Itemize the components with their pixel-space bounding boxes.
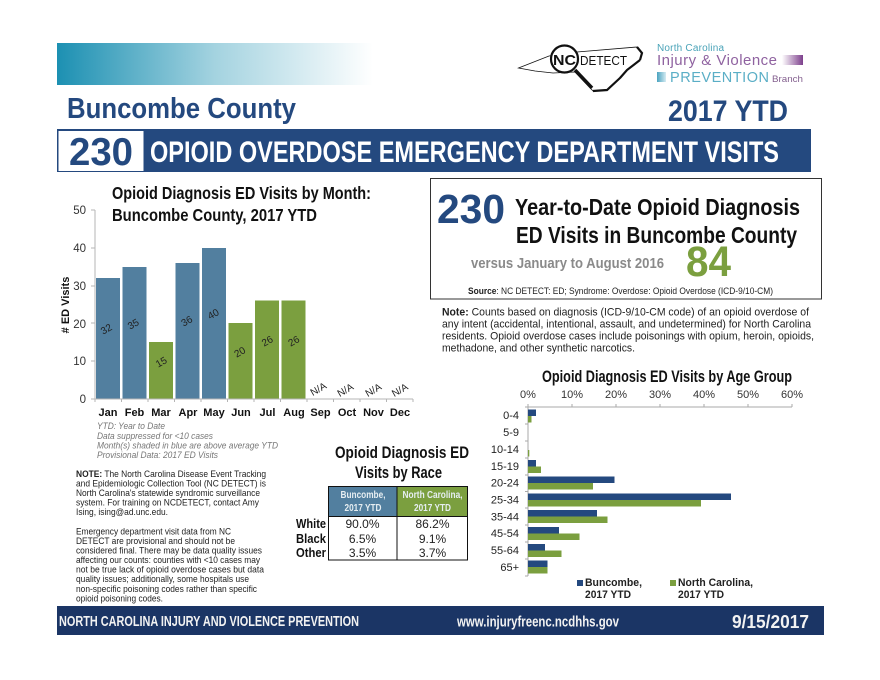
bar value labels: 15 — [154, 355, 170, 370]
race table heading: Opioid Diagnosis ED — [335, 443, 469, 462]
note: NC DETECT description: Emergency department visit data from NC — [76, 526, 231, 536]
percent axis: 40% — [693, 389, 715, 401]
note: case definition: any intent (accidental, intentional, assault, and undetermined) for North Carolina — [442, 318, 811, 330]
note: NC DETECT description: not be true lack of opioid overdose cases but data — [76, 564, 265, 574]
chart footnotes — [97, 421, 278, 460]
table: visits by race: 90.0% — [345, 517, 380, 531]
callout: year-to-date total: ED Visits in Buncombe County — [516, 222, 797, 248]
note: NC DETECT description: non-specific poisoning codes rather than specific — [76, 584, 257, 594]
chart title: by month: Buncombe County, 2017 YTD — [112, 205, 317, 225]
note: case definition — [442, 306, 814, 354]
note: NC DETECT description: North Carolina's statewide syndromic surveillance — [76, 488, 260, 498]
chart: ED visits by month — [60, 183, 413, 419]
month labels: Nov — [363, 407, 385, 419]
bar value labels: 35 — [126, 317, 142, 332]
percent axis: 50% — [737, 389, 759, 401]
title band — [57, 129, 811, 174]
table: visits by race: 6.5% — [349, 532, 377, 546]
note: case definition: Note: Counts based on diagnosis (ICD-9/10-CM code) of an opioid overdose of — [442, 306, 810, 318]
bar value labels — [99, 307, 411, 400]
table: visits by race: 3.7% — [419, 546, 447, 560]
logo: NC DETECT: DETECT — [580, 54, 627, 68]
bar value labels: N/A — [309, 381, 329, 399]
callout: year-to-date total: 230 — [437, 186, 505, 232]
note: NC DETECT description: DETECT are provisional and should not be — [76, 536, 235, 546]
table: visits by race: 9.1% — [419, 532, 447, 546]
logo: NC DETECT: NC — [553, 52, 576, 69]
note: NC DETECT description: and Epidemiologic Collection Tool (NC DETECT) is — [76, 478, 266, 488]
note: NC DETECT description: opioid poisoning codes. — [76, 594, 163, 604]
age group labels: 25-34 — [491, 494, 519, 506]
y axis label: # ED Visits — [60, 277, 72, 333]
note: NC DETECT description: system. For training on NCDETECT, contact Amy — [76, 498, 259, 508]
age group labels: 10-14 — [491, 444, 519, 456]
table: visits by race: 3.5% — [349, 546, 377, 560]
month labels: Jul — [260, 407, 275, 419]
table: visits by race — [296, 486, 468, 560]
age group labels: 0-4 — [503, 410, 519, 422]
month labels: Sep — [310, 407, 331, 419]
month labels — [99, 407, 410, 419]
chart title: by age group: Opioid Diagnosis ED Visits by Age Group — [542, 367, 792, 386]
y axis: 20 — [73, 319, 86, 331]
chart footnotes: Month(s) shaded in blue are above average YTD — [97, 440, 278, 450]
bar value labels: 20 — [233, 345, 248, 360]
table: visits by race: 86.2% — [415, 517, 450, 531]
x axis — [95, 399, 413, 402]
race table heading: Visits by Race — [355, 463, 442, 482]
chart: ED visits by age group — [491, 367, 803, 601]
note: NC DETECT description: affecting our counts: counties with <10 cases may — [76, 555, 260, 565]
y axis: 10 — [73, 356, 86, 368]
race table heading — [335, 443, 469, 482]
logo: Injury and Violence Prevention Branch — [657, 43, 803, 86]
table: visits by race: Black — [296, 532, 326, 546]
y axis: 0 — [80, 394, 86, 406]
chart title: by month: Opioid Diagnosis ED Visits by Month: — [112, 183, 371, 203]
county heading: Buncombe County — [67, 93, 296, 125]
logo: Injury and Violence Prevention Branch: North Carolina — [657, 43, 724, 54]
table: visits by race: Buncombe, — [340, 489, 386, 501]
age group labels: 65+ — [500, 562, 519, 574]
bar value labels: 32 — [99, 322, 115, 337]
logo: Injury and Violence Prevention Branch: PREVENTION — [670, 70, 769, 86]
month labels: Mar — [151, 407, 171, 419]
bar value labels: N/A — [336, 382, 356, 400]
note: NC DETECT description — [76, 469, 266, 604]
note: NC DETECT description: NOTE: The North Carolina Disease Event Tracking — [76, 469, 266, 479]
bar value labels: N/A — [390, 382, 411, 400]
chart footnotes: YTD: Year to Date — [97, 421, 165, 431]
age group labels: 20-24 — [491, 478, 519, 490]
percent axis: 0% — [520, 389, 536, 401]
note: case definition: residents. Opioid overdose cases include poisonings with opium, heroin, opioids, — [442, 330, 814, 342]
year heading: 2017 YTD — [668, 95, 788, 128]
legend: 2017 YTD — [585, 589, 631, 601]
decorative gradient banner — [57, 43, 373, 85]
callout: year-to-date total: 84 — [686, 238, 731, 286]
note: case definition: methadone, and other synthetic narcotics. — [442, 342, 635, 354]
legend: Buncombe, — [585, 577, 642, 589]
month labels: Oct — [338, 407, 357, 419]
logo: Injury and Violence Prevention Branch: Branch — [772, 74, 803, 85]
percent axis — [520, 389, 803, 576]
bar value labels: 26 — [260, 334, 276, 349]
legend — [577, 577, 753, 601]
callout: year-to-date total: Year-to-Date Opioid Diagnosis — [515, 194, 800, 220]
table: visits by race: White — [296, 517, 326, 531]
month labels: Apr — [179, 407, 198, 419]
age group labels: 5-9 — [503, 427, 519, 439]
percent axis: 30% — [649, 389, 671, 401]
footer band: NORTH CAROLINA INJURY AND VIOLENCE PREVENTION — [59, 613, 359, 630]
legend: 2017 YTD — [678, 589, 724, 601]
age group labels: 15-19 — [491, 461, 519, 473]
y axis — [73, 205, 95, 406]
table: visits by race: Other — [296, 546, 326, 560]
table: visits by race: 2017 YTD — [344, 502, 382, 514]
month labels: Feb — [125, 407, 145, 419]
bar value labels: N/A — [364, 382, 384, 400]
Buncombe bars — [528, 410, 731, 567]
callout: year-to-date total: Source: NC DETECT: ED; Syndrome: Overdose: Opioid Overdose (ICD-9/10-CM) — [468, 286, 773, 296]
age group labels: 35-44 — [491, 512, 519, 524]
legend: North Carolina, — [678, 577, 753, 589]
chart title: by month — [112, 183, 371, 225]
bar value labels: 26 — [287, 334, 302, 349]
logo: Injury and Violence Prevention Branch: Injury & Violence — [657, 52, 777, 69]
age group labels — [491, 410, 519, 574]
bars — [96, 248, 306, 399]
note: NC DETECT description: Ising, ising@ad.unc.edu. — [76, 507, 168, 517]
footer band: www.injuryfreenc.ncdhhs.gov — [456, 614, 619, 630]
age group labels: 55-64 — [491, 545, 519, 557]
callout: year-to-date total: versus January to August 2016 — [471, 255, 664, 272]
note: NC DETECT description: quality issues; additionally, some hospitals use — [76, 574, 249, 584]
month labels: May — [203, 407, 226, 419]
title band: 230 — [69, 131, 133, 174]
chart footnotes: Data suppressed for <10 cases — [97, 431, 213, 441]
month labels: Jan — [99, 407, 118, 419]
month labels: Dec — [390, 407, 410, 419]
percent axis: 60% — [781, 389, 803, 401]
table: visits by race: 2017 YTD — [414, 502, 451, 514]
footer band — [57, 606, 824, 635]
y axis: 40 — [73, 243, 86, 255]
North Carolina bars — [528, 416, 701, 574]
percent axis: 10% — [561, 389, 583, 401]
table: visits by race: North Carolina, — [402, 489, 463, 501]
chart footnotes: Provisional Data: 2017 ED Visits — [97, 450, 218, 460]
y axis: 30 — [73, 281, 86, 293]
note: NC DETECT description: considered final. There may be data quality issues — [76, 546, 262, 556]
percent axis: 20% — [605, 389, 627, 401]
age group labels: 45-54 — [491, 528, 519, 540]
bar value labels: 40 — [206, 307, 222, 322]
month labels: Aug — [283, 407, 305, 419]
y axis: 50 — [73, 205, 86, 217]
footer band: 9/15/2017 — [732, 612, 809, 632]
month labels: Jun — [231, 407, 251, 419]
bar value labels: 36 — [180, 314, 195, 329]
callout: year-to-date total — [430, 178, 822, 299]
logo: NC DETECT — [518, 46, 642, 91]
